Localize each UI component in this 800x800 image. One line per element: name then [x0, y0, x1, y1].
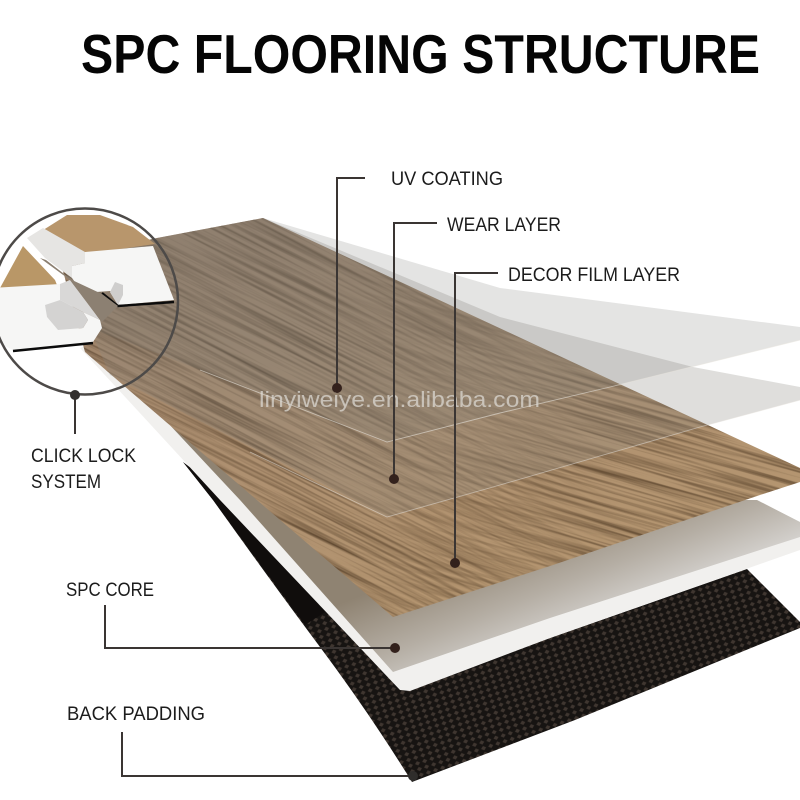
layer: UV coating film	[60, 218, 800, 442]
upper joint wood	[40, 215, 155, 254]
lower joint wood	[0, 246, 57, 288]
callout: click lock system: CLICK LOCK	[31, 446, 136, 467]
callout: UV coating	[332, 169, 503, 393]
callout: click lock system	[31, 390, 136, 493]
callout: back padding: BACK PADDING	[67, 704, 205, 725]
callout: back padding	[67, 704, 418, 781]
lens ring	[0, 208, 178, 394]
upper joint face	[72, 246, 174, 305]
layer: back padding	[183, 462, 800, 782]
lower joint face	[0, 284, 102, 350]
callout: wear layer: WEAR LAYER	[447, 215, 561, 236]
lower joint tongue	[60, 280, 100, 320]
callout: click lock system: SYSTEM	[31, 472, 101, 493]
upper joint side	[27, 228, 85, 278]
click lock magnifier	[0, 208, 178, 394]
channel between joints	[40, 258, 118, 322]
callout: decor film layer	[450, 265, 680, 568]
callout: SPC core: SPC CORE	[66, 580, 154, 601]
upper joint black backing	[102, 293, 174, 306]
lower joint groove	[45, 300, 88, 330]
upper joint notch	[110, 282, 123, 305]
layered plank illustration	[60, 218, 800, 782]
callout: wear layer	[389, 215, 561, 484]
callout: UV coating: UV COATING	[391, 169, 503, 190]
layer: wear film	[60, 218, 800, 517]
callout: SPC core	[66, 580, 400, 653]
layer: SPC core	[80, 340, 800, 691]
watermark: linyiweiye.en.alibaba.com	[259, 387, 540, 412]
callout: decor film layer: DECOR FILM LAYER	[508, 265, 680, 286]
layer: decor film	[60, 218, 800, 617]
lower joint black backing	[13, 343, 93, 351]
